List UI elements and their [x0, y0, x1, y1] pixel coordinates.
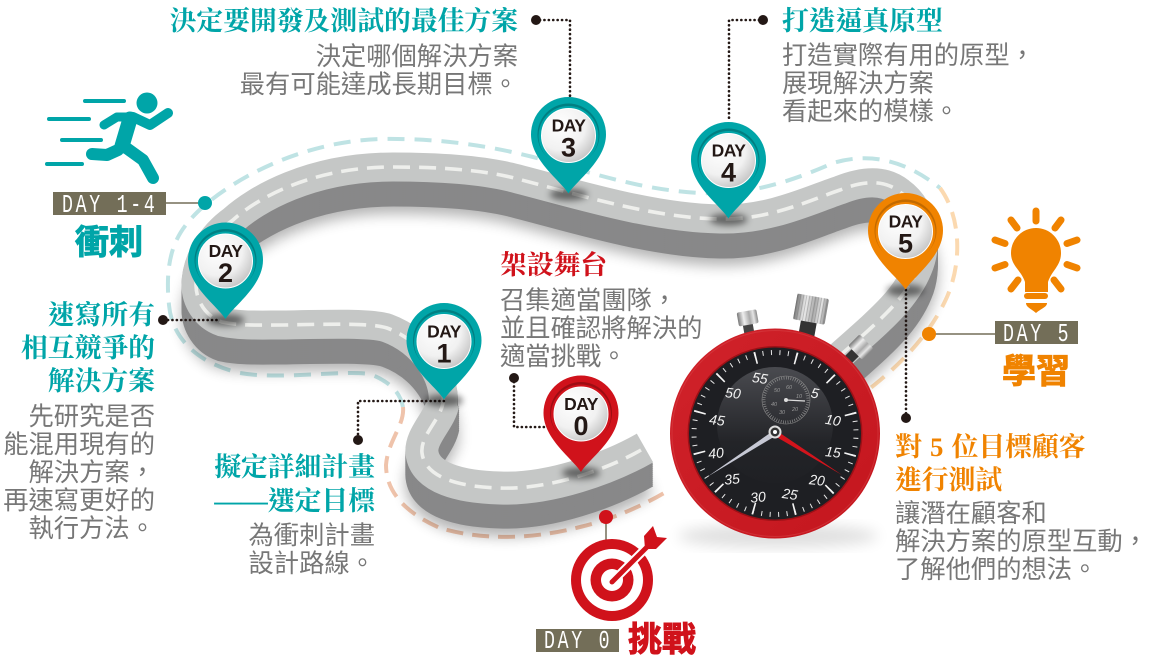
- pin: day 0: 0: [573, 411, 589, 441]
- pin: day 0: [544, 376, 618, 479]
- sub dial: 10: [796, 394, 803, 400]
- text: day 2 description: 解決方案: [48, 365, 155, 396]
- text: day 1 description: 擬定詳細計畫: [214, 452, 375, 482]
- pin: day 3: [531, 97, 606, 200]
- text: day 5 description: 讓潛在顧客和: [895, 500, 1047, 528]
- stopwatch right button: [841, 334, 874, 367]
- dial numbers: 5: [810, 384, 820, 402]
- dial numbers: 50: [724, 384, 742, 402]
- pin: day 0: DAY: [564, 394, 599, 414]
- text: day 5 description: 了解他們的想法。: [895, 556, 1097, 584]
- text: day 4 description: 看起來的模樣。: [782, 98, 959, 126]
- text: day 4 description: 打造實際有用的原型，: [782, 42, 1035, 70]
- pin: day 2: DAY: [209, 241, 243, 261]
- dial numbers: 55: [751, 369, 769, 387]
- day 1-4 connector: [165, 196, 212, 210]
- text: day 4 description: [782, 5, 1035, 126]
- sub dial: 60: [786, 385, 793, 391]
- leader: day 1: [353, 401, 444, 445]
- dial numbers: 40: [707, 444, 725, 462]
- text: day 1 description: 設計路線。: [248, 550, 375, 578]
- text: day 2 description: [3, 300, 155, 543]
- dial numbers: 35: [723, 470, 741, 488]
- tag: day 0: DAY 0: [544, 626, 612, 656]
- pin: day 2: 2: [218, 258, 233, 288]
- text: day 5 description: 進行測試: [895, 465, 1002, 495]
- stopwatch left button: [737, 309, 761, 337]
- day 5 connector: [922, 327, 996, 341]
- heading: learn: 學習: [1002, 353, 1070, 391]
- leader: day 4: [729, 15, 768, 122]
- text: day 2 description: 再速寫更好的: [3, 487, 155, 515]
- text: day 2 description: 速寫所有: [48, 300, 155, 330]
- hands: [707, 426, 842, 477]
- tag: day 5: DAY 5: [1003, 319, 1071, 349]
- pin: day 2: [188, 222, 263, 326]
- heading: challenge: 挑戰: [628, 621, 696, 659]
- dial numbers: [707, 369, 842, 506]
- icon: runner: [47, 92, 168, 178]
- pin: day 5: 5: [898, 228, 913, 258]
- text: day 2 description: 能混用現有的: [3, 431, 155, 459]
- dial numbers: 30: [749, 488, 767, 506]
- pin: day 1: DAY: [427, 322, 462, 342]
- leader: day 2: [158, 315, 220, 325]
- sub dial: 50: [774, 388, 781, 394]
- stopwatch: [670, 294, 880, 548]
- pin: day 4: DAY: [712, 140, 746, 160]
- text: day 2 description: 執行方法。: [28, 515, 155, 543]
- text: day 0 description: 召集適當團隊，: [500, 287, 677, 315]
- stopwatch top crown: [791, 294, 829, 338]
- pin: day 4: 4: [721, 158, 736, 188]
- dial numbers: 20: [807, 471, 826, 489]
- sub dial: 40: [771, 402, 778, 408]
- pin: day 1: 1: [436, 338, 452, 368]
- text: day 5 description: 解決方案的原型互動，: [895, 528, 1148, 556]
- sub dial: 30: [779, 410, 786, 416]
- dial numbers: 10: [824, 411, 842, 429]
- pin: day 3: DAY: [552, 116, 586, 136]
- text: day 0 description: [500, 250, 702, 371]
- text: day 4 description: 打造逼真原型: [782, 5, 943, 36]
- day 0 connector: [599, 510, 613, 542]
- pin: day 3: 3: [561, 132, 576, 162]
- dashed route: orange learning arc: [868, 188, 957, 390]
- tag: day 1-4: DAY 1-4: [62, 190, 158, 220]
- leader: day 0: [509, 373, 546, 427]
- pin: day 1: [406, 303, 482, 406]
- text: day 1 description: [213, 452, 376, 578]
- leader: day 5: [901, 290, 911, 423]
- text: day 2 description: 相互競爭的: [21, 333, 155, 363]
- road: [196, 167, 923, 520]
- text: day 5 description: [895, 432, 1148, 584]
- text: day 3 description: 最有可能達成長期目標。: [240, 71, 518, 99]
- text: day 3 description: 決定哪個解決方案: [316, 43, 518, 71]
- sub dial: 20: [791, 407, 799, 413]
- pin: day 5: [868, 193, 943, 296]
- text: day 4 description: 展現解決方案: [782, 70, 934, 98]
- dial numbers: 45: [708, 411, 726, 429]
- text: day 1 description: ——選定目標: [213, 486, 376, 516]
- text: day 2 description: 解決方案，: [28, 459, 155, 487]
- text: day 2 description: 先研究是否: [28, 403, 155, 431]
- text: day 3 description: 決定要開發及測試的最佳方案: [170, 5, 518, 36]
- text: day 1 description: 為衝刺計畫: [248, 522, 375, 550]
- dial numbers: 15: [824, 443, 842, 461]
- heading: sprint: 衝刺: [75, 224, 143, 262]
- text: day 0 description: 架設舞台: [500, 250, 608, 280]
- sub dial: [762, 376, 810, 424]
- dashed route: peach challenge arc: [386, 407, 664, 537]
- pin: day 4: [691, 122, 766, 226]
- text: day 3 description: [170, 5, 518, 99]
- dial numbers: 25: [780, 485, 799, 503]
- dashed route: teal upper sprint loop: [168, 139, 940, 407]
- text: day 5 description: 對 5 位目標顧客: [895, 432, 1086, 462]
- text: day 0 description: 並且確認將解決的: [500, 315, 702, 343]
- icon: target: [571, 526, 667, 621]
- leader: day 3: [531, 15, 570, 97]
- icon: light bulb: [995, 211, 1077, 313]
- text: day 0 description: 適當挑戰。: [500, 343, 626, 371]
- pin: day 5: DAY: [889, 212, 923, 232]
